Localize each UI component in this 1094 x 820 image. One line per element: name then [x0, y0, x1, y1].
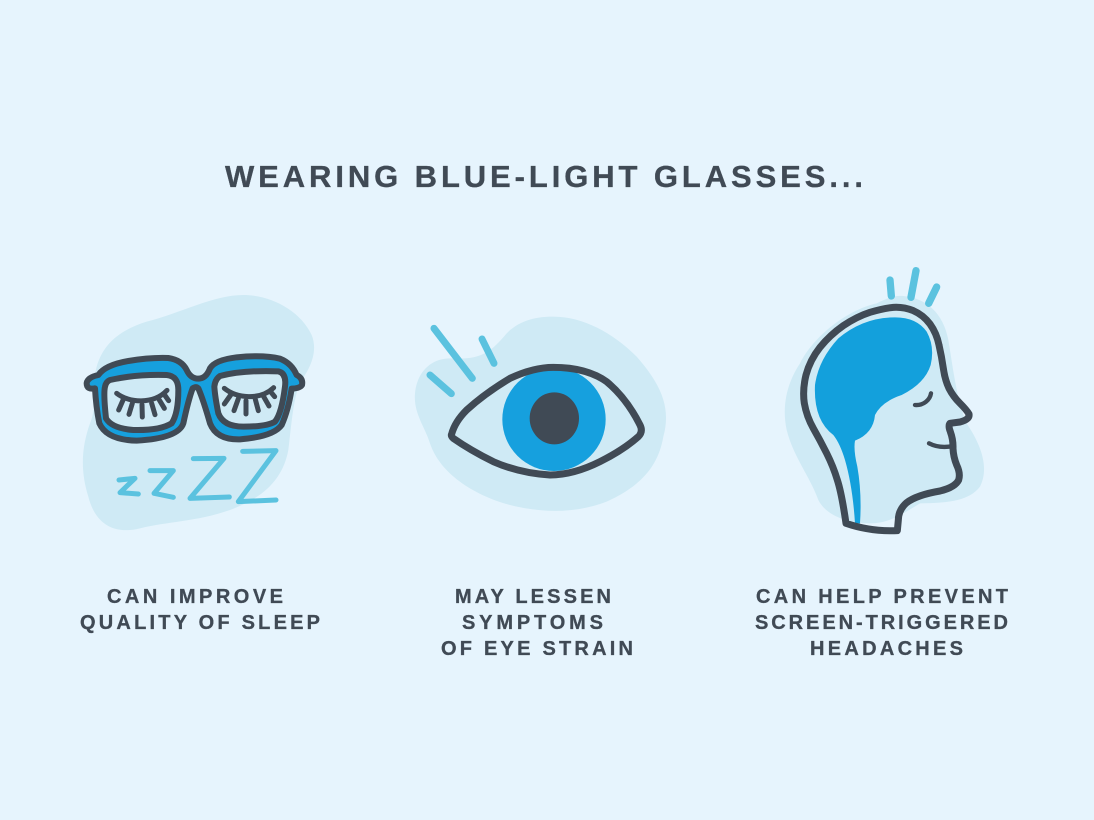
pupil [530, 392, 579, 444]
panel: eye strain [415, 317, 666, 660]
caption: eye strain [441, 586, 633, 660]
strain lines [430, 328, 494, 394]
blob background [415, 317, 666, 511]
left lens [104, 375, 178, 430]
closed eye lashes [117, 388, 275, 417]
blob background [83, 295, 314, 530]
right lens [214, 371, 285, 427]
title: WEARING BLUE-LIGHT GLASSES... [225, 159, 863, 194]
caption: sleep: QUALITY OF SLEEP [80, 612, 320, 634]
caption: eye strain: OF EYE STRAIN [441, 638, 633, 660]
caption: headaches: CAN HELP PREVENT [756, 586, 1008, 608]
caption: sleep: CAN IMPROVE [107, 586, 283, 608]
caption: headaches: HEADACHES [810, 638, 963, 660]
closed eye and smile [915, 393, 953, 447]
eye outline [451, 367, 641, 475]
pain lines [890, 271, 937, 303]
caption: eye strain: MAY LESSEN [455, 586, 611, 608]
glasses frame [87, 356, 302, 441]
iris [502, 368, 606, 471]
icon: eye [415, 317, 666, 511]
caption: eye strain: SYMPTOMS [462, 612, 603, 634]
head outline [804, 307, 969, 531]
caption: headaches: SCREEN-TRIGGERED [755, 612, 1008, 634]
icon: head profile [785, 271, 984, 531]
icon: sleeping glasses [83, 295, 314, 530]
sleep letters z z Z Z [119, 451, 276, 502]
blob background [785, 296, 984, 523]
caption: headaches [755, 586, 1008, 660]
panel: sleep [80, 295, 320, 634]
caption: sleep [80, 586, 320, 634]
brain and spine [815, 317, 932, 523]
panel: headaches [755, 271, 1008, 660]
